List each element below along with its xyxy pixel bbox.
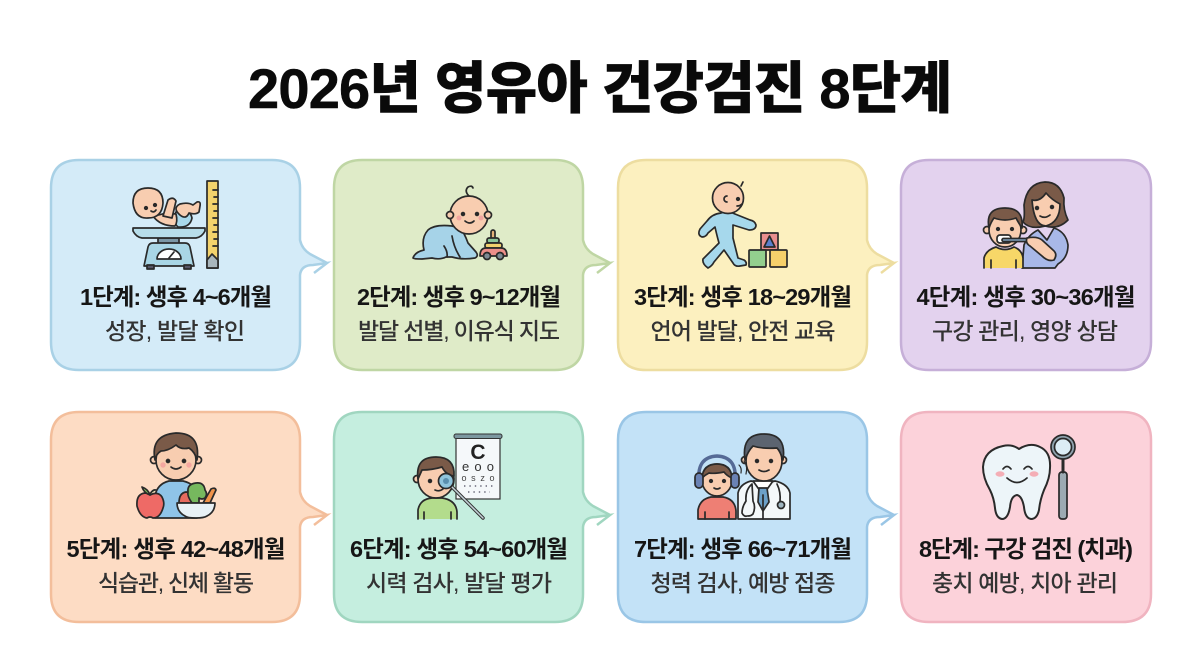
panel background 6 xyxy=(334,412,610,622)
panel background 3 xyxy=(618,160,894,370)
panel: step 6 xyxy=(334,412,610,622)
icon: crawling baby with toy xyxy=(413,186,507,260)
icon: smiling tooth and dental mirror xyxy=(983,435,1075,519)
icon: child with healthy food xyxy=(137,433,216,518)
step 1 heading: 1단계: 생후 4~6개월 xyxy=(80,284,272,310)
icon: parent brushing child's teeth xyxy=(984,182,1068,268)
panel background 4 xyxy=(901,160,1151,370)
step 6 description: 시력 검사, 발달 평가 xyxy=(366,570,552,596)
step 8 description: 충치 예방, 치아 관리 xyxy=(932,570,1118,596)
icon: child at eye chart xyxy=(414,434,502,519)
step 7 description: 청력 검사, 예방 접종 xyxy=(650,570,836,596)
step 5 description: 식습관, 신체 활동 xyxy=(98,570,254,596)
step 5 heading: 5단계: 생후 42~48개월 xyxy=(66,536,286,562)
icon: walking toddler with blocks xyxy=(699,182,787,268)
panel background 7 xyxy=(618,412,894,622)
icon: baby on scale with ruler xyxy=(133,181,218,269)
step 8 heading: 8단계: 구강 검진 (치과) xyxy=(919,536,1133,562)
step 3 heading: 3단계: 생후 18~29개월 xyxy=(634,284,852,310)
step 1 description: 성장, 발달 확인 xyxy=(105,318,245,344)
step 7 heading: 7단계: 생후 66~71개월 xyxy=(634,536,852,562)
step 2 description: 발달 선별, 이유식 지도 xyxy=(358,318,560,344)
step 3 description: 언어 발달, 안전 교육 xyxy=(650,318,836,344)
icon: child with headphones and doctor xyxy=(695,434,790,519)
step 2 heading: 2단계: 생후 9~12개월 xyxy=(357,284,561,310)
step 4 heading: 4단계: 생후 30~36개월 xyxy=(916,284,1136,310)
panel background 5 xyxy=(51,412,327,622)
icon: child at eye chart: e o o xyxy=(462,459,494,474)
panel: step 7 xyxy=(618,412,894,622)
icon: child at eye chart: C xyxy=(470,441,486,464)
panel background 8 xyxy=(901,412,1151,622)
step 6 heading: 6단계: 생후 54~60개월 xyxy=(350,536,568,562)
panel: step 1 xyxy=(51,160,327,370)
panel: step 2 xyxy=(334,160,610,370)
icon: child at eye chart: o s z o xyxy=(462,473,494,483)
title: 2026년 영유아 건강검진 8단계 xyxy=(248,57,952,120)
panel: step 4 xyxy=(901,160,1151,370)
panel background 2 xyxy=(334,160,610,370)
step 4 description: 구강 관리, 영양 상담 xyxy=(932,318,1118,344)
panel: step 8 xyxy=(901,412,1151,622)
panel: step 5 xyxy=(51,412,327,622)
panel background 1 xyxy=(51,160,327,370)
panel: step 3 xyxy=(618,160,894,370)
